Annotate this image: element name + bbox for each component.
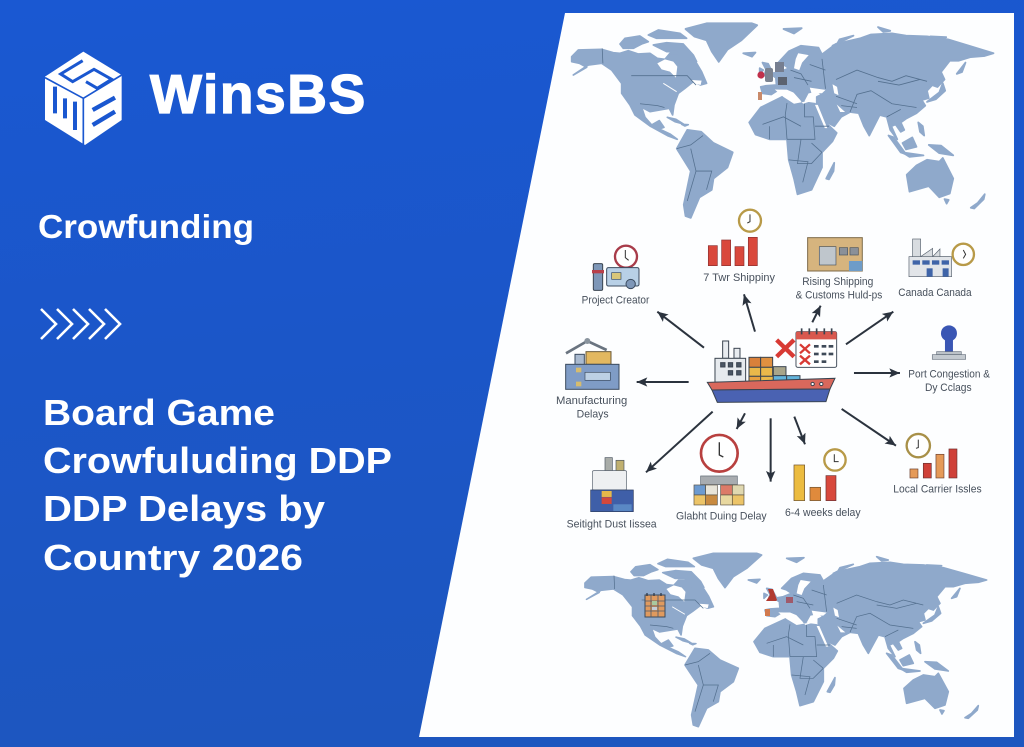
logo bbox=[45, 52, 365, 145]
icon: red cross bbox=[777, 340, 794, 357]
icon and label: customs holdups: & Customs Huld-ps bbox=[796, 289, 882, 301]
icon and label: factory bbox=[898, 239, 974, 299]
wordmark: WinsBS bbox=[150, 63, 365, 125]
icon and label: global delay bbox=[676, 435, 767, 522]
map highlights bbox=[645, 589, 793, 617]
icon and label: factory: Canada Canada bbox=[898, 287, 972, 299]
icon and label: weeks delay bbox=[785, 449, 861, 519]
title: Crowfuluding DDP bbox=[43, 440, 392, 481]
white content panel bbox=[419, 13, 1014, 737]
icon and label: manufacturing: Delays bbox=[577, 408, 609, 420]
title: DDP Delays by bbox=[43, 488, 325, 529]
icon and label: customs holdups: Rising Shipping bbox=[802, 276, 873, 288]
icon and label: port stamp: Port Congestion & bbox=[908, 369, 990, 381]
icon: container ship bbox=[707, 341, 835, 402]
icon and label: local carrier bbox=[893, 434, 982, 495]
icon and label: weeks delay: 6-4 weeks delay bbox=[785, 507, 861, 519]
icon and label: project creator bbox=[582, 246, 650, 306]
icon and label: sealed documents: Seitight Dust Iissea bbox=[567, 518, 657, 530]
icon: cube logo bbox=[45, 52, 122, 145]
top world map bbox=[572, 23, 994, 218]
arrows bbox=[637, 294, 900, 482]
icon and label: manufacturing bbox=[556, 338, 627, 420]
icon and label: shipping chart: 7 Twr Shippiny bbox=[703, 272, 776, 284]
title: Country 2026 bbox=[43, 537, 303, 578]
title bbox=[43, 392, 392, 578]
icon and label: manufacturing: Manufacturing bbox=[556, 395, 627, 407]
bottom world map bbox=[585, 553, 987, 727]
icon and label: port stamp: Dy Cclags bbox=[925, 382, 972, 394]
icon and label: sealed documents bbox=[567, 458, 657, 530]
icon and label: port stamp bbox=[908, 325, 990, 394]
central diagram bbox=[556, 210, 990, 530]
icon and label: project creator: Project Creator bbox=[582, 294, 650, 306]
title: Board Game bbox=[43, 392, 275, 433]
icon and label: global delay: Glabht Duing Delay bbox=[676, 510, 767, 522]
icon and label: customs holdups bbox=[796, 238, 882, 301]
icon: calendar bbox=[796, 328, 837, 367]
icon and label: local carrier: Local Carrier Issles bbox=[893, 483, 982, 495]
icon: chevrons bbox=[41, 309, 120, 339]
category label: Crowfunding bbox=[38, 208, 254, 245]
icon: calendar on map bbox=[645, 593, 665, 617]
map highlights bbox=[757, 62, 787, 100]
icon and label: shipping chart bbox=[703, 210, 776, 284]
